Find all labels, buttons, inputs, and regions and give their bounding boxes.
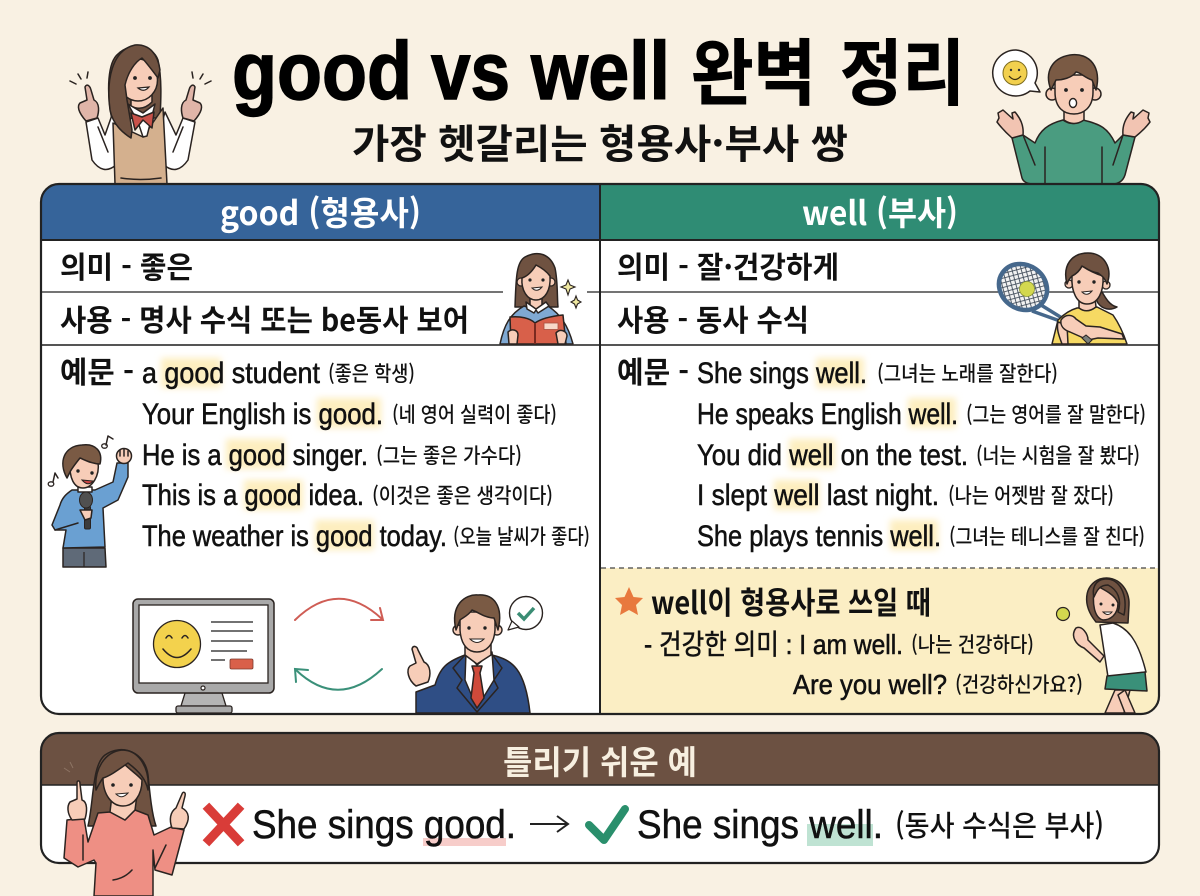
header: good column: good (형용사)	[220, 187, 421, 235]
arrow: red curved arrow	[295, 599, 383, 620]
wrong vs right example sentence: She sings good.	[252, 803, 516, 847]
wrong vs right example sentence: She sings well.	[637, 803, 883, 847]
illustration: boy singing with microphone	[48, 436, 132, 567]
illustration: woman pointing up in coral sweater	[64, 750, 188, 896]
illustration: student girl pointing up	[70, 45, 211, 184]
wrong vs right example sentence	[209, 803, 1104, 847]
good: example sentences: (그는 좋은 가수다)	[376, 440, 522, 470]
illustration: girl reading a book with sparkles	[500, 254, 581, 344]
good: usage row: 사용 - 명사 수식 또는 be동사 보어	[60, 296, 469, 340]
well: example sentences: (나는 어젯밤 잘 잤다)	[948, 480, 1114, 510]
title: well	[530, 26, 670, 117]
title	[232, 15, 965, 120]
callout: well as an adjective: well이 형용사로 쓰일 때	[651, 578, 931, 623]
callout: well as an adjective: (나는 건강하다)	[911, 629, 1034, 659]
well: example sentences: He speaks English well.	[697, 398, 958, 431]
well: example sentences: She plays tennis well.	[697, 520, 941, 553]
illustration: surprised boy with smiley speech bubble	[993, 50, 1150, 184]
icon: green check	[589, 809, 625, 840]
good: example sentences	[142, 357, 590, 553]
illustration: monitor with smiley	[133, 599, 274, 713]
title: vs	[431, 26, 510, 117]
well: example label: 예문 -	[617, 348, 689, 392]
callout: well as an adjective: Are you well?	[793, 669, 947, 700]
well: example sentences: She sings well.	[697, 357, 867, 390]
well: example sentences: I slept well last night.	[697, 479, 939, 512]
well: example sentences: You did well on the test.	[697, 439, 968, 472]
heading: common mistakes: 틀리기 쉬운 예	[503, 736, 697, 784]
well: example sentences: (그녀는 노래를 잘한다)	[877, 358, 1058, 388]
good: example sentences: (좋은 학생)	[328, 358, 415, 388]
header: well column: well (부사)	[802, 187, 958, 235]
icon: red X	[209, 809, 238, 840]
subtitle: 가장 헷갈리는 형용사·부사 쌍	[352, 112, 848, 170]
good: example sentences: He is a good singer.	[142, 439, 368, 472]
good: example sentences: Your English is good.	[142, 398, 383, 431]
well: usage row: 사용 - 동사 수식	[617, 296, 809, 340]
good: example sentences: a good student	[142, 357, 321, 390]
good: example label: 예문 -	[60, 348, 134, 392]
arrow: green curved arrow	[295, 669, 382, 690]
well: example sentences: (그는 영어를 잘 말한다)	[966, 399, 1146, 429]
good: example sentences: This is a good idea.	[142, 479, 364, 512]
comparison table panel	[41, 184, 1159, 714]
title: 정리	[840, 15, 965, 120]
title: good	[232, 26, 412, 117]
callout: well as an adjective: - 건강한 의미 : I am well.	[644, 629, 903, 660]
good: example sentences: (이것은 좋은 생각이다)	[372, 480, 553, 510]
well: example sentences	[697, 357, 1146, 553]
panel: common mistakes	[41, 733, 1159, 863]
callout: well as an adjective	[615, 578, 1083, 700]
illustration: girl holding tennis racket	[990, 253, 1127, 344]
good: example sentences: (오늘 날씨가 좋다)	[453, 521, 590, 551]
well: example sentences: (너는 시험을 잘 봤다)	[976, 440, 1140, 470]
callout: well as an adjective: (건강하신가요?)	[955, 669, 1083, 699]
good: example sentences: (네 영어 실력이 좋다)	[392, 399, 557, 429]
well: example sentences: (그녀는 테니스를 잘 친다)	[949, 521, 1145, 551]
good: example sentences: The weather is good today.	[142, 520, 447, 553]
icon: orange star	[615, 587, 643, 615]
title: 완벽	[691, 15, 816, 120]
well: meaning row: 의미 - 잘·건강하게	[617, 243, 839, 287]
arrow: wrong to right	[530, 816, 568, 832]
illustration: girl catching a ball	[1056, 578, 1147, 713]
good: meaning row: 의미 - 좋은	[60, 243, 193, 287]
wrong vs right example sentence: (동사 수식은 부사)	[895, 803, 1104, 845]
illustration: man in suit pointing with check bubble	[408, 595, 542, 713]
